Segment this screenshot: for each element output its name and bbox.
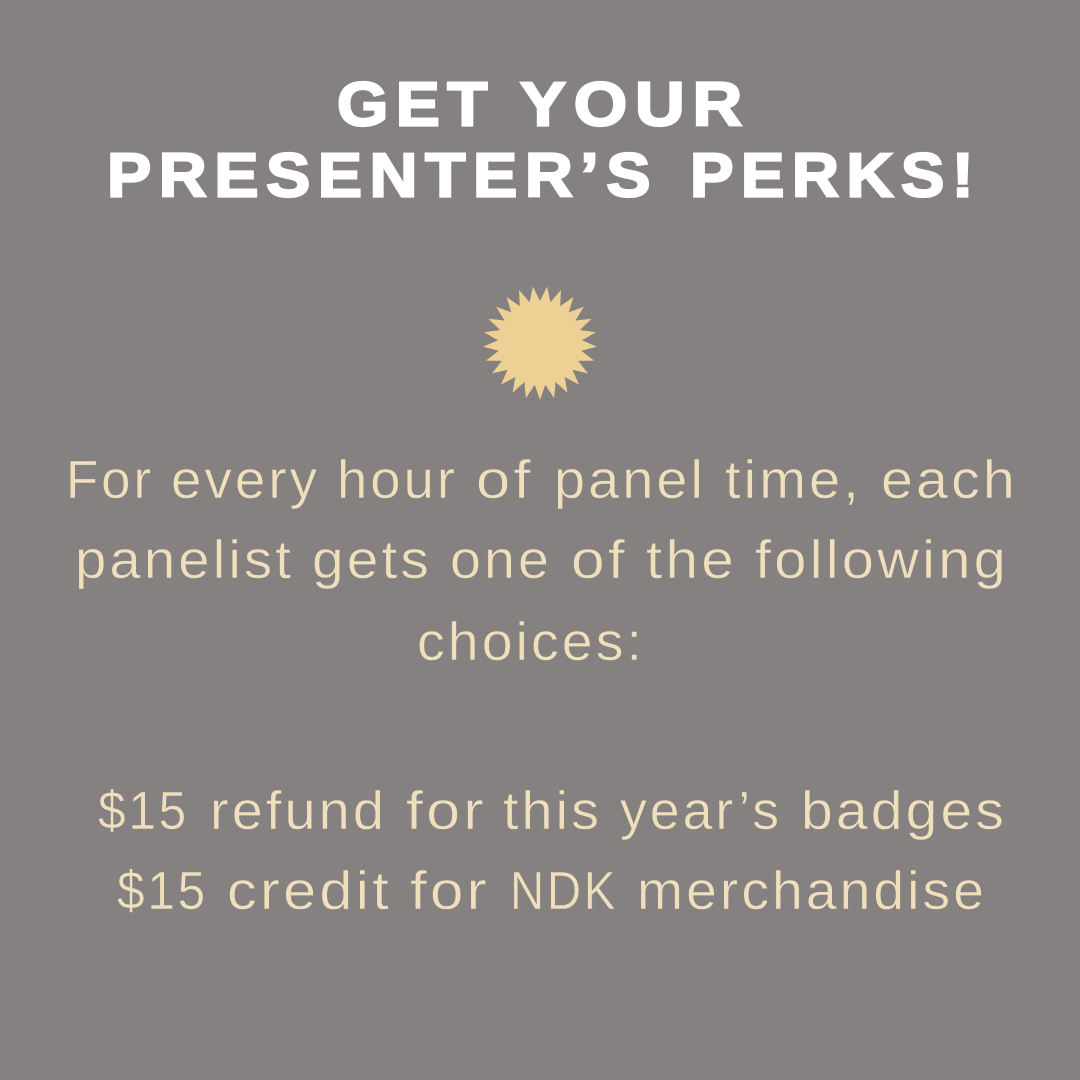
intro text block: the bbox=[646, 530, 737, 590]
intro text block: of bbox=[571, 530, 628, 590]
choices list: merchandise bbox=[637, 861, 987, 921]
choices list: $15 bbox=[98, 781, 189, 841]
choices list: $15 bbox=[117, 861, 208, 921]
choices list: credit bbox=[227, 861, 392, 921]
intro text block: every bbox=[171, 450, 320, 510]
choices list: for bbox=[410, 861, 490, 921]
intro text block: following bbox=[755, 530, 1009, 590]
intro text block: of bbox=[476, 450, 534, 510]
intro text block: time, bbox=[725, 450, 862, 510]
title: GET bbox=[337, 70, 495, 140]
choices list: for bbox=[406, 781, 487, 841]
intro text block: panel bbox=[554, 450, 706, 510]
intro text block: panelist bbox=[75, 530, 294, 590]
intro text block: choices: bbox=[417, 612, 645, 672]
intro text block: gets bbox=[312, 530, 432, 590]
choices list: NDK bbox=[510, 861, 618, 921]
intro text block: one bbox=[450, 530, 552, 590]
intro text block: each bbox=[881, 450, 1018, 510]
title bbox=[107, 70, 981, 210]
choices list bbox=[98, 781, 1007, 921]
title: PERKS! bbox=[690, 142, 981, 210]
intro text block: hour bbox=[337, 450, 458, 510]
intro text block bbox=[66, 450, 1018, 672]
title: YOUR bbox=[520, 70, 750, 140]
title: PRESENTER’S bbox=[107, 142, 658, 210]
choices list: refund bbox=[210, 781, 387, 841]
choices list: badges bbox=[801, 781, 1007, 841]
choices list: year’s bbox=[620, 781, 782, 841]
intro text block: For bbox=[66, 450, 154, 510]
choices list: this bbox=[503, 781, 602, 841]
icon: gold starburst bbox=[483, 286, 597, 400]
